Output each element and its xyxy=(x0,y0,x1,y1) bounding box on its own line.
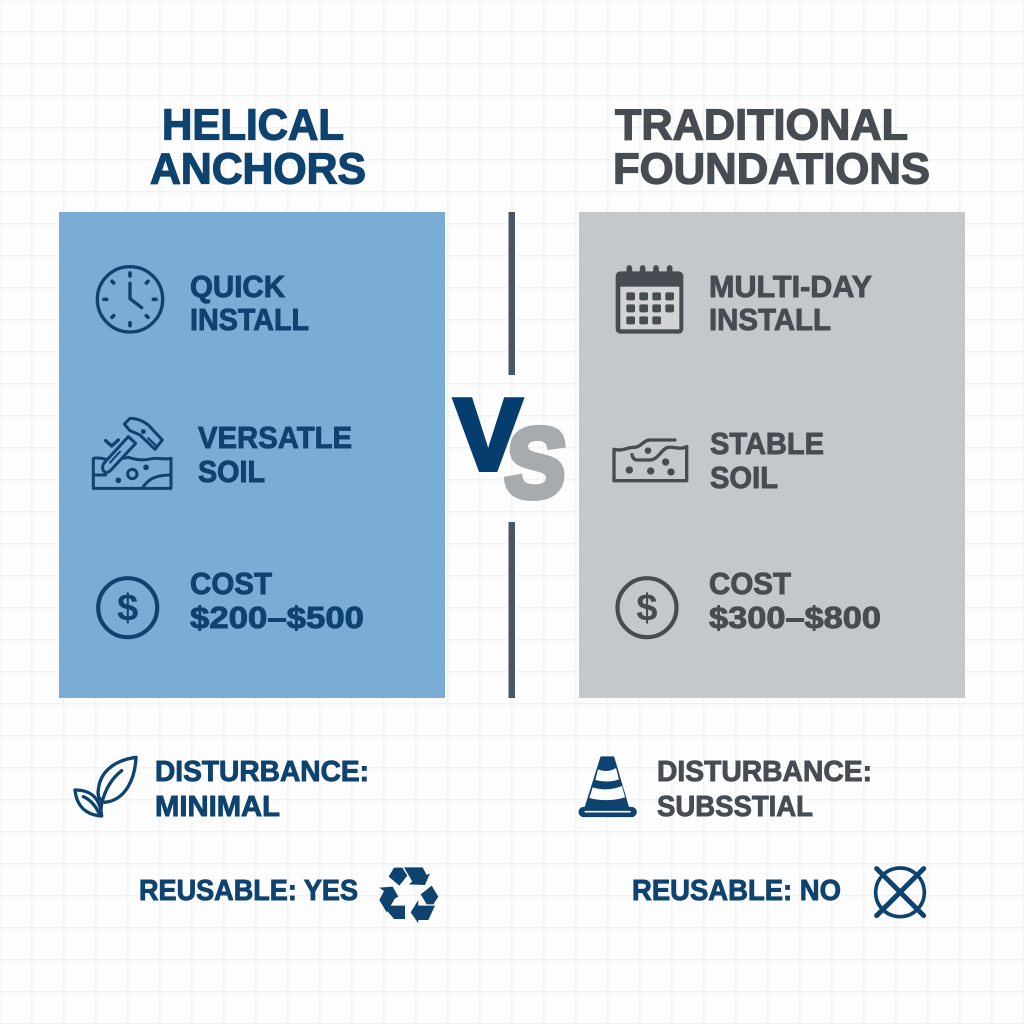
label: multi-day install xyxy=(709,270,872,337)
label: quick install: INSTALL xyxy=(190,303,309,337)
label: cost xyxy=(709,567,881,635)
divider: center bottom xyxy=(508,522,515,698)
label: cost xyxy=(190,567,364,635)
row: disturbance minimal xyxy=(75,756,369,823)
panel: helical anchors xyxy=(59,212,445,698)
title: traditional foundations xyxy=(613,102,930,194)
title: traditional foundations: FOUNDATIONS xyxy=(613,146,930,194)
label: disturbance substantial xyxy=(657,756,872,823)
icon: calendar xyxy=(616,268,683,334)
label: multi-day install: INSTALL xyxy=(709,303,831,337)
panel: traditional foundations xyxy=(579,212,965,698)
label: disturbance substantial: DISTURBANCE: xyxy=(657,756,872,788)
label: disturbance minimal xyxy=(155,756,369,823)
icon: recycle xyxy=(379,867,438,923)
icon: hammer in soil xyxy=(93,418,171,488)
label: cost: $300–$800 xyxy=(709,601,881,635)
label: cost: $200–$500 xyxy=(190,601,364,635)
icon: clock xyxy=(97,267,163,332)
label: multi-day install: MULTI-DAY xyxy=(709,270,872,304)
icon: dollar xyxy=(618,578,676,637)
label: disturbance minimal: MINIMAL xyxy=(155,791,280,823)
label: versatile soil: SOIL xyxy=(198,455,265,489)
icon: leaf xyxy=(75,757,136,816)
icon: stable soil xyxy=(614,440,687,481)
label: versatile soil: VERSATLE xyxy=(198,421,352,455)
label: reusable yes: REUSABLE: YES xyxy=(139,875,358,907)
label: stable soil xyxy=(710,427,824,495)
row: reusable yes xyxy=(139,867,438,923)
label: stable soil: SOIL xyxy=(710,461,778,495)
row: disturbance substantial xyxy=(579,756,872,823)
label: quick install: QUICK xyxy=(190,270,285,304)
label: disturbance substantial: SUBSSTIAL xyxy=(657,791,813,823)
label: cost: COST xyxy=(709,567,791,601)
title: traditional foundations: TRADITIONAL xyxy=(615,102,908,150)
versus mark: S xyxy=(501,409,571,519)
icon: dollar: $ xyxy=(636,588,658,630)
label: quick install xyxy=(190,270,309,337)
icon: dollar: $ xyxy=(117,588,138,630)
label: cost: COST xyxy=(190,567,272,601)
versus mark: V xyxy=(454,380,522,492)
divider: center top xyxy=(508,212,515,375)
row: reusable no xyxy=(632,868,924,917)
icon: traffic cone xyxy=(579,757,636,816)
title: helical anchors: ANCHORS xyxy=(150,146,366,194)
label: disturbance minimal: DISTURBANCE: xyxy=(155,756,369,788)
icon: crossed circle xyxy=(876,868,924,917)
label: stable soil: STABLE xyxy=(710,427,824,461)
label: reusable no: REUSABLE: NO xyxy=(632,875,841,907)
versus mark xyxy=(454,380,571,519)
title: helical anchors: HELICAL xyxy=(162,102,344,150)
title: helical anchors xyxy=(150,102,366,194)
label: versatile soil xyxy=(198,421,352,489)
icon: dollar xyxy=(98,578,157,637)
